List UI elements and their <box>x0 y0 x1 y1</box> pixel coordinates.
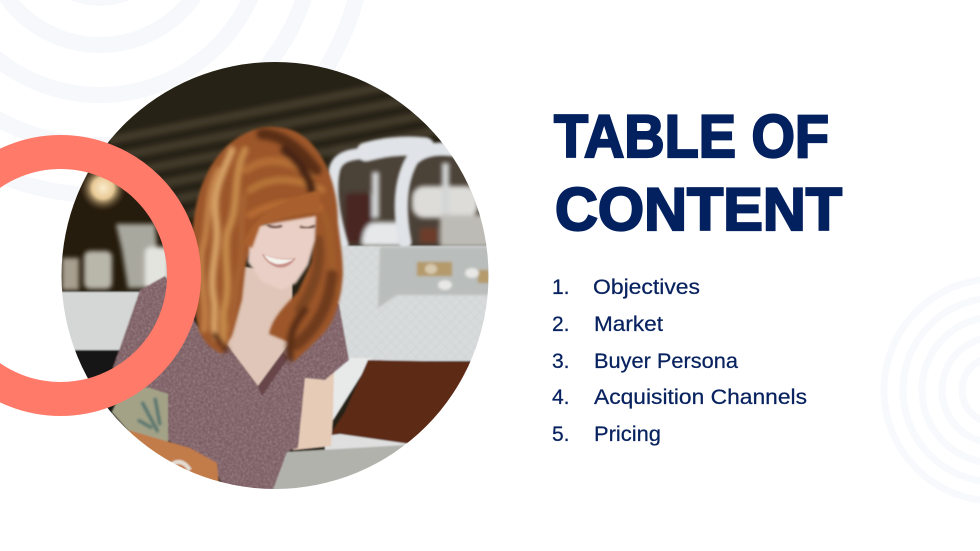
laptop <box>272 444 404 489</box>
cushion seat <box>330 246 495 361</box>
title <box>554 103 842 243</box>
black seat <box>74 349 120 413</box>
item 3: Buyer Persona <box>594 350 738 373</box>
item 2: Market <box>594 313 663 336</box>
cup <box>172 462 190 470</box>
item 2: 2. <box>552 313 570 336</box>
brown leather sofa <box>332 359 470 444</box>
wall stripes <box>109 84 436 220</box>
hair strands <box>201 134 336 358</box>
item 2 <box>552 313 663 336</box>
bangs <box>244 190 320 248</box>
tan labels <box>417 262 489 290</box>
item 4: Acquisition Channels <box>594 386 807 409</box>
item 3: 3. <box>552 350 570 373</box>
white seat <box>324 432 408 452</box>
coral ring <box>0 152 184 399</box>
face <box>248 216 316 290</box>
counter <box>62 290 140 352</box>
shirt collar shade <box>258 352 288 396</box>
grey panel <box>378 247 495 308</box>
list: contents <box>552 276 807 446</box>
photo: woman at laptop in cafe <box>50 55 495 495</box>
neck and chest <box>222 265 292 386</box>
jars <box>62 224 169 290</box>
orange bag <box>128 430 219 486</box>
tattooed arm <box>112 385 168 442</box>
hair mass <box>192 127 343 362</box>
title: TABLE OF <box>554 103 829 170</box>
item 5: Pricing <box>594 423 661 446</box>
blurry white shapes <box>345 163 490 247</box>
right arm <box>293 370 334 450</box>
background rings: bottom right <box>884 279 980 501</box>
item 4: 4. <box>552 386 570 409</box>
chair loops <box>333 146 455 245</box>
left dark shelf area <box>62 178 193 290</box>
lamp glow <box>81 172 124 210</box>
slide <box>0 0 842 489</box>
eyes <box>268 225 314 228</box>
item 1: 1. <box>552 276 570 299</box>
white pillow <box>332 358 371 421</box>
item 5: 5. <box>552 423 570 446</box>
item 5 <box>552 423 661 446</box>
title: CONTENT <box>555 176 842 243</box>
mouth <box>262 254 296 268</box>
background rings: top left <box>0 0 365 195</box>
item 1: Objectives <box>593 276 700 299</box>
chairs backdrop <box>335 150 495 248</box>
item 1 <box>552 276 700 299</box>
shirt <box>113 276 349 495</box>
